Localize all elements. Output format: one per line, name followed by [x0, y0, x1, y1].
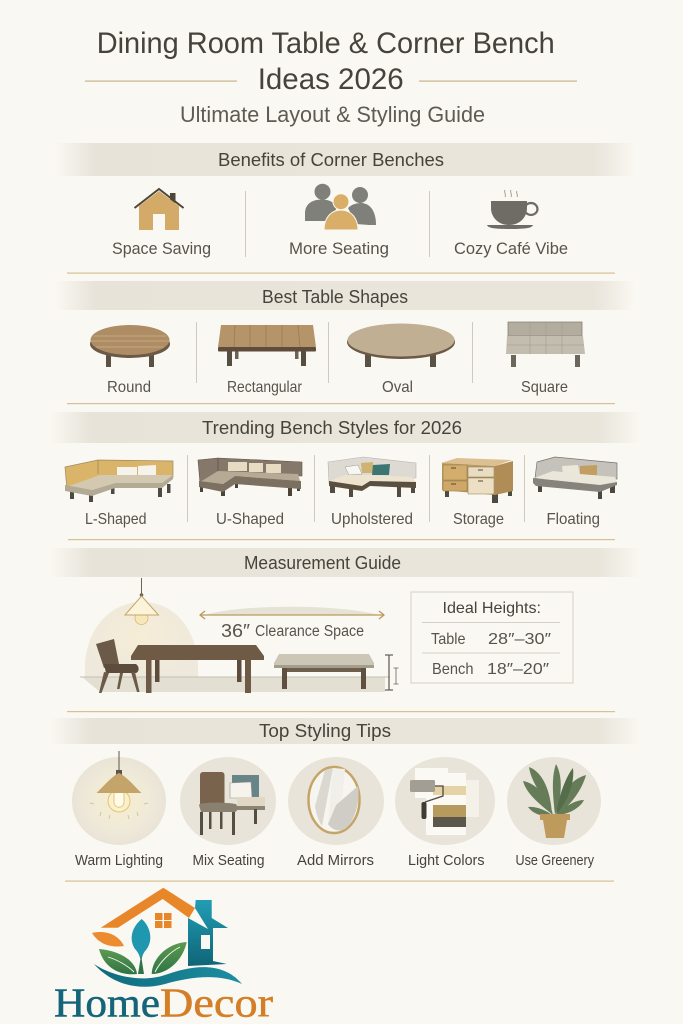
icon: dining table	[131, 645, 264, 693]
panel: benefits of corner benches	[55, 143, 635, 258]
label: space saving: Space Saving	[112, 239, 211, 258]
clearance label	[221, 621, 364, 641]
icon: dining chair	[96, 639, 140, 693]
icon: group of people	[305, 184, 376, 230]
panel: ideal heights table	[411, 592, 573, 683]
icon: floating bench	[533, 457, 617, 499]
title	[97, 27, 555, 96]
title: Ideas 2026	[258, 63, 404, 96]
icon: rectangular table	[218, 325, 316, 366]
heading: best table shapes: Best Table Shapes	[262, 287, 408, 307]
label: light colors: Light Colors	[408, 852, 484, 869]
label: oval: Oval	[382, 379, 413, 396]
icon: warm lighting	[72, 751, 166, 845]
icon: storage bench	[441, 458, 513, 503]
label: mix seating: Mix Seating	[192, 852, 264, 869]
label: rectangular: Rectangular	[227, 379, 303, 396]
logo leaves	[92, 919, 187, 974]
floor shadow	[82, 677, 385, 692]
subtitle: Ultimate Layout & Styling Guide	[180, 102, 485, 127]
logo wordmark	[54, 980, 273, 1024]
label: u-shaped: U-Shaped	[216, 511, 284, 528]
row: bench height: Bench	[432, 661, 474, 678]
title block	[85, 27, 577, 127]
panel: measurement guide	[50, 548, 640, 693]
logo wave	[94, 964, 242, 987]
heading: top styling tips: Top Styling Tips	[259, 721, 391, 741]
label: round: Round	[107, 379, 151, 396]
clearance arrow	[200, 607, 384, 619]
clearance label: 36″	[221, 621, 251, 641]
title: Dining Room Table & Corner Bench	[97, 27, 555, 60]
icon: square table	[506, 322, 585, 367]
logo roof	[101, 888, 195, 928]
icon: u-shaped bench	[198, 458, 302, 496]
panel: top styling tips	[50, 718, 640, 869]
label: add mirrors: Add Mirrors	[297, 852, 374, 869]
heading: trending bench styles: Trending Bench Styles for 2026	[202, 418, 462, 438]
row: table height	[431, 631, 551, 648]
icon: mix seating	[180, 757, 276, 845]
logo: home decor	[54, 888, 273, 1024]
panel: trending bench styles	[50, 412, 640, 528]
label: cozy cafe vibe: Cozy Café Vibe	[454, 239, 568, 258]
label: storage: Storage	[453, 511, 504, 528]
label: upholstered: Upholstered	[331, 511, 413, 528]
icon: light colors	[395, 757, 495, 845]
icon: coffee cup	[487, 190, 538, 229]
icon: round table	[90, 325, 170, 367]
icon: pendant lamp	[125, 578, 158, 624]
panel: best table shapes	[55, 281, 635, 396]
label: more seating: More Seating	[289, 239, 389, 258]
row: table height: Table	[431, 631, 466, 648]
clearance label: Clearance Space	[255, 623, 364, 640]
label: floating: Floating	[546, 511, 600, 528]
heading: ideal heights: Ideal Heights:	[442, 600, 541, 617]
icon: oval table	[347, 324, 455, 367]
heading: benefits: Benefits of Corner Benches	[218, 150, 444, 170]
row: bench height	[432, 661, 549, 678]
height bracket	[385, 655, 398, 690]
logo window	[155, 913, 172, 928]
icon: bench	[274, 654, 374, 689]
row: bench height: 18″–20″	[487, 661, 549, 678]
label: warm lighting: Warm Lighting	[75, 852, 163, 869]
row: table height: 28″–30″	[488, 631, 551, 648]
label: square: Square	[521, 379, 568, 396]
icon: plant	[507, 757, 601, 845]
logo tower	[188, 900, 228, 966]
icon: house	[134, 189, 184, 230]
heading: measurement guide: Measurement Guide	[244, 553, 401, 573]
diagram glow	[85, 602, 198, 677]
icon: mirror	[288, 757, 384, 845]
icon: l-shaped bench	[65, 460, 173, 502]
icon: upholstered bench	[328, 457, 416, 497]
label: use greenery: Use Greenery	[516, 852, 594, 869]
label: l-shaped: L-Shaped	[85, 511, 146, 528]
